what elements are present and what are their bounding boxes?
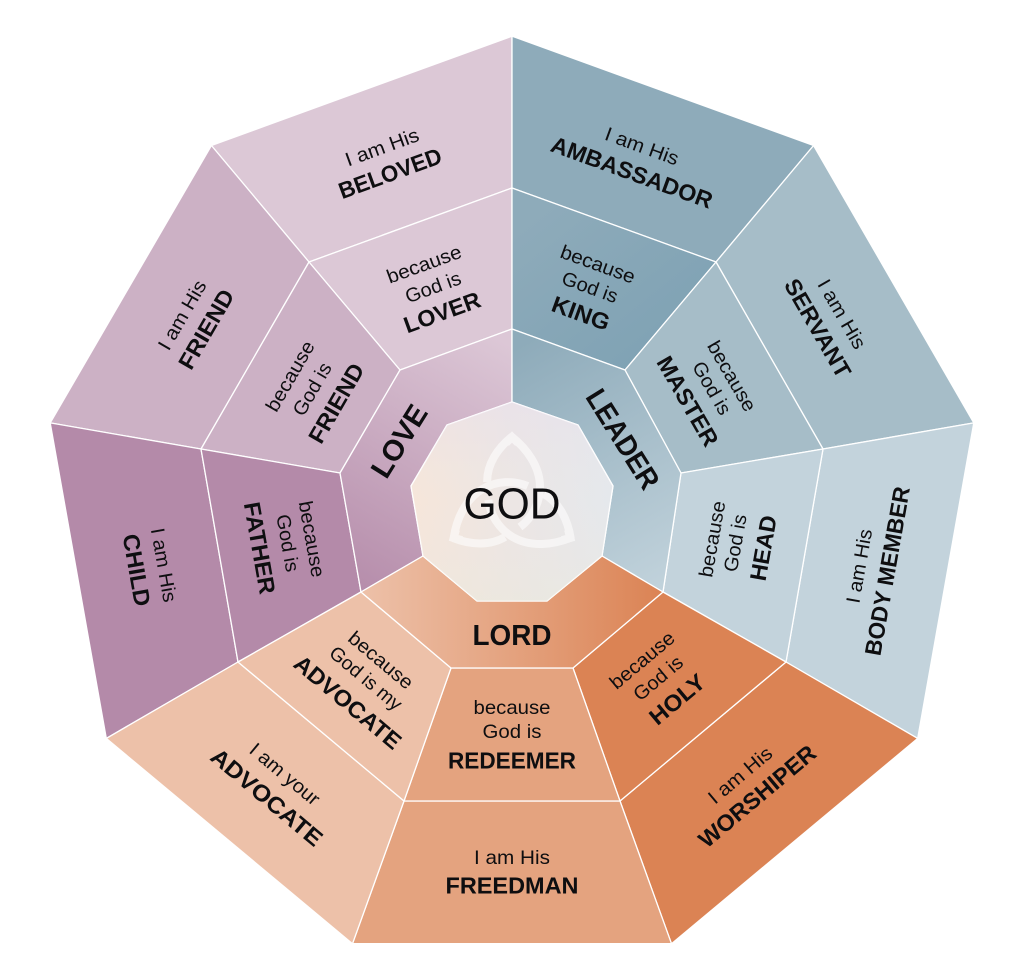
segment: head: God is — [720, 512, 752, 574]
segment: body member — [786, 423, 974, 738]
segment: redeemer: because — [474, 697, 550, 719]
segment: beloved — [211, 36, 512, 262]
segment: king: because — [557, 241, 638, 288]
segment: head: HEAD — [745, 513, 782, 583]
segment: freedman: I am His — [474, 847, 550, 869]
segment: servant — [716, 146, 974, 449]
segment: servant: SERVANT — [779, 274, 857, 382]
band: love: LOVE — [365, 399, 435, 484]
segment: worshiper: I am His — [704, 742, 777, 809]
segment: child: I am His — [146, 526, 181, 604]
band: lord: LORD — [472, 620, 552, 652]
segment: worshiper — [620, 662, 918, 944]
segment: friend inner: God is — [289, 359, 337, 420]
band: lord — [361, 556, 663, 668]
segment: holy: HOLY — [644, 668, 710, 730]
segment: lover: LOVER — [400, 286, 484, 338]
band: leader — [512, 329, 681, 592]
segment: redeemer: REDEEMER — [448, 747, 576, 773]
segment: friend inner: because — [262, 337, 320, 416]
segment: child: CHILD — [118, 532, 156, 608]
segment: lover: because — [384, 241, 465, 288]
segment: father: FATHER — [239, 500, 281, 596]
band: leader: LEADER — [579, 384, 665, 496]
segment: holy: because — [606, 627, 679, 694]
segment: lover: God is — [402, 267, 465, 308]
segment: friend outer: I am His — [154, 276, 212, 354]
segment: friend inner: FRIEND — [303, 359, 370, 448]
segment: head — [663, 449, 823, 662]
segment: redeemer: God is — [483, 721, 542, 743]
segment: head: because — [695, 499, 730, 579]
segment: advocate outer — [106, 662, 404, 944]
segment: servant: I am His — [813, 276, 870, 353]
segment: king: God is — [559, 268, 621, 308]
segment: master: because — [702, 337, 760, 416]
segment: advocate outer: ADVOCATE — [206, 743, 328, 852]
segment: beloved: I am His — [342, 124, 422, 171]
segment: father — [201, 449, 361, 662]
segment: freedman: FREEDMAN — [446, 872, 578, 898]
segment: holy — [573, 592, 786, 801]
segment: body member: I am His — [842, 527, 877, 605]
segment: friend outer: FRIEND — [173, 285, 240, 374]
segment: king: KING — [548, 291, 614, 336]
segment: father: God is — [271, 513, 303, 574]
segment: freedman — [352, 801, 672, 944]
segment: advocate outer: I am your — [245, 739, 324, 811]
segment: worshiper: WORSHIPER — [693, 739, 821, 853]
segment: master: MASTER — [651, 351, 724, 451]
segment: friend outer — [50, 146, 309, 449]
center: god: GOD — [464, 480, 560, 528]
segment: friend inner — [201, 262, 400, 473]
segment: master — [625, 262, 823, 473]
segment: lover — [309, 188, 512, 370]
icon: trinity knot — [440, 434, 600, 589]
segment: advocate inner: because — [344, 627, 417, 694]
segment: advocate inner — [238, 592, 451, 801]
segment: master: God is — [687, 358, 735, 419]
segment: ambassador: AMBASSADOR — [548, 131, 717, 214]
segment: king — [512, 188, 716, 370]
segment: body member: BODY MEMBER — [860, 484, 915, 658]
segment: child — [50, 423, 238, 738]
segment: advocate inner: ADVOCATE — [289, 650, 407, 755]
segment: father: because — [294, 499, 329, 579]
segment: advocate inner: God is my — [325, 642, 406, 715]
band: love — [340, 329, 512, 592]
segment: redeemer — [404, 668, 620, 801]
center: god — [411, 402, 613, 601]
segment: beloved: BELOVED — [335, 143, 445, 204]
segment: ambassador: I am His — [602, 123, 682, 170]
segment: ambassador — [512, 36, 814, 262]
segment: holy: God is — [629, 651, 688, 706]
